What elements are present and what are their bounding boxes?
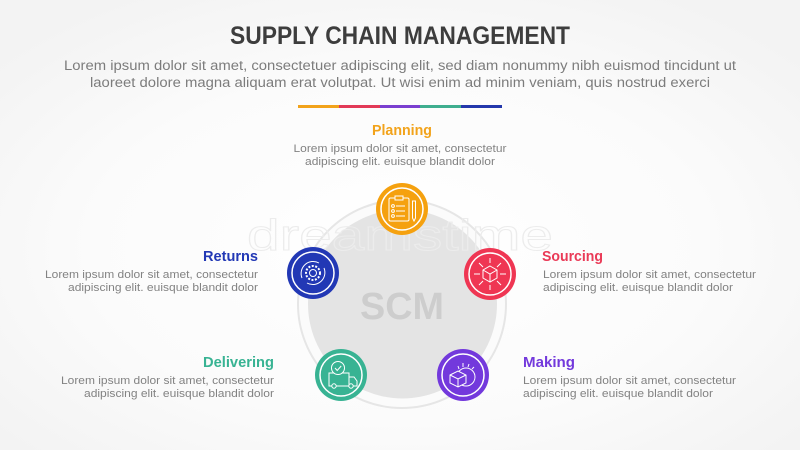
text: sourcing: adipiscing elit. euisque blandit dolor	[543, 282, 733, 294]
text: making: Lorem ipsum dolor sit amet, consectetur	[523, 375, 736, 387]
icon: clipboard	[389, 196, 416, 221]
text: returns: adipiscing elit. euisque blandit dolor	[68, 282, 258, 294]
text: delivering: Lorem ipsum dolor sit amet, consectetur	[61, 375, 274, 387]
text: delivering: Delivering	[203, 354, 274, 371]
subtitle text: Lorem ipsum dolor sit amet, consectetuer adipiscing elit, sed diam nonummy nibh euismod tincidunt ut	[64, 58, 736, 73]
centre label SCM: SCM	[360, 286, 444, 328]
text: returns: Returns	[203, 248, 258, 265]
central disc	[308, 210, 497, 398]
title: SUPPLY CHAIN MANAGEMENT	[230, 22, 570, 50]
text: planning	[294, 122, 507, 168]
subtitle text: laoreet dolore magna aliquam erat volutpat. Ut wisi enim ad minim veniam, quis nostrud exerci	[90, 75, 710, 90]
text: returns: Lorem ipsum dolor sit amet, consectetur	[45, 269, 258, 281]
icon: box and gear	[450, 363, 475, 387]
text: making: adipiscing elit. euisque blandit dolor	[523, 388, 713, 400]
text: making: Making	[523, 354, 575, 371]
text: sourcing: Lorem ipsum dolor sit amet, consectetur	[543, 269, 756, 281]
text: delivering	[61, 354, 274, 400]
text: sourcing: Sourcing	[542, 248, 603, 265]
node: returns	[287, 247, 339, 299]
node: delivering	[315, 349, 367, 401]
icon: truck with check	[329, 362, 357, 388]
text: planning: adipiscing elit. euisque blandit dolor	[305, 156, 495, 168]
colour divider bar	[298, 105, 502, 108]
outer ring	[298, 200, 506, 408]
text: sourcing	[542, 248, 756, 294]
icon: box with arrows	[474, 258, 506, 290]
node: planning	[376, 183, 428, 235]
icon: gear with cycle arrows	[301, 261, 325, 285]
text: returns	[45, 248, 258, 294]
node: sourcing	[464, 248, 516, 300]
node: making	[437, 349, 489, 401]
text: delivering: adipiscing elit. euisque blandit dolor	[84, 388, 274, 400]
text: planning: Planning	[372, 122, 432, 139]
watermark: dreamstime	[247, 211, 553, 260]
text: making	[523, 354, 736, 400]
subtitle text	[64, 58, 736, 90]
text: planning: Lorem ipsum dolor sit amet, consectetur	[294, 143, 507, 155]
